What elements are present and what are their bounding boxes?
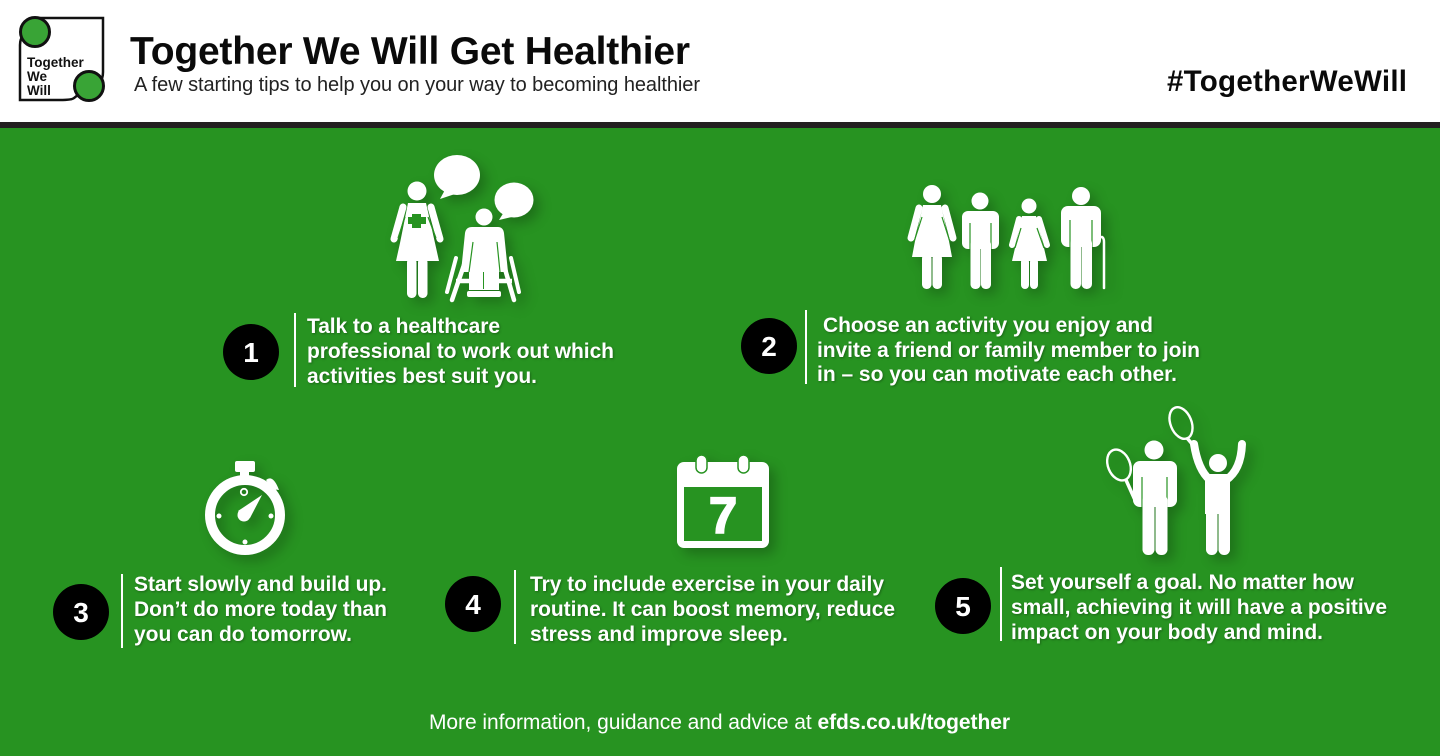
text: tip 1: activities best suit you. <box>307 365 537 388</box>
icon: calendar <box>677 455 769 548</box>
hashtag: #TogetherWeWill <box>1167 65 1407 98</box>
logo <box>20 18 104 100</box>
tip 2 <box>741 185 1200 386</box>
text: tip 1: professional to work out which <box>307 340 614 363</box>
tip 1 <box>223 155 614 388</box>
text: tip 5: impact on your body and mind. <box>1011 621 1323 644</box>
number 3: 3 <box>73 597 89 628</box>
tip 5 <box>935 404 1387 644</box>
text: tip 2: invite a friend or family member to join <box>817 339 1200 362</box>
number 4 <box>445 576 501 632</box>
icon: two people with tennis rackets <box>1103 404 1242 555</box>
number 5: 5 <box>955 591 971 622</box>
number 5 <box>935 578 991 634</box>
text: tip 2 <box>817 314 1200 386</box>
text: tip 4 <box>530 573 895 646</box>
icon: calendar: 7 <box>709 487 737 544</box>
number 1 <box>223 324 279 380</box>
text: tip 4: Try to include exercise in your daily <box>530 573 884 596</box>
number 3 <box>53 584 109 640</box>
header band <box>0 0 1440 128</box>
logo: Will <box>27 83 51 98</box>
number 2: 2 <box>761 331 777 362</box>
text: tip 3: you can do tomorrow. <box>134 623 352 646</box>
text: tip 5: Set yourself a goal. No matter how <box>1011 571 1355 594</box>
logo: Together <box>27 55 84 70</box>
icon: nurse and wheelchair user with speech bubbles <box>394 155 534 300</box>
number 2 <box>741 318 797 374</box>
text: tip 3 <box>134 573 387 646</box>
text: tip 4: routine. It can boost memory, reduce <box>530 598 895 621</box>
text: tip 5: small, achieving it will have a positive <box>1011 596 1387 619</box>
title: Together We Will Get Healthier <box>130 30 690 73</box>
text: tip 2: in – so you can motivate each other. <box>817 363 1177 386</box>
number 4: 4 <box>465 589 481 620</box>
text: tip 1 <box>307 315 614 388</box>
text: tip 3: Start slowly and build up. <box>134 573 387 596</box>
text: tip 1: Talk to a healthcare <box>307 315 500 338</box>
text: tip 2: Choose an activity you enjoy and <box>823 314 1153 337</box>
logo: We <box>27 69 47 84</box>
icon: family of four <box>911 185 1104 289</box>
text: tip 3: Don’t do more today than <box>134 598 387 621</box>
text: tip 5 <box>1011 571 1387 644</box>
text: tip 4: stress and improve sleep. <box>530 623 788 646</box>
number 1: 1 <box>243 337 259 368</box>
tip 4 <box>445 455 895 646</box>
subtitle: A few starting tips to help you on your way to becoming healthier <box>134 74 700 96</box>
tip 3 <box>53 461 387 648</box>
footer text: More information, guidance and advice at efds.co.uk/together <box>429 711 1010 734</box>
icon: stopwatch <box>210 461 280 550</box>
